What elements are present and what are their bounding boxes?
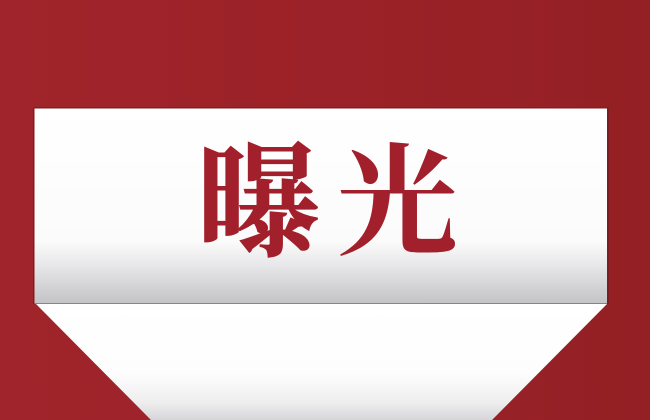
title: 曝光 <box>197 136 458 273</box>
title: 曝光: 曝 <box>197 136 321 273</box>
title: 曝光: 光 <box>337 138 458 272</box>
upper white banner panel <box>33 107 609 304</box>
lower folded white panel <box>36 304 607 420</box>
